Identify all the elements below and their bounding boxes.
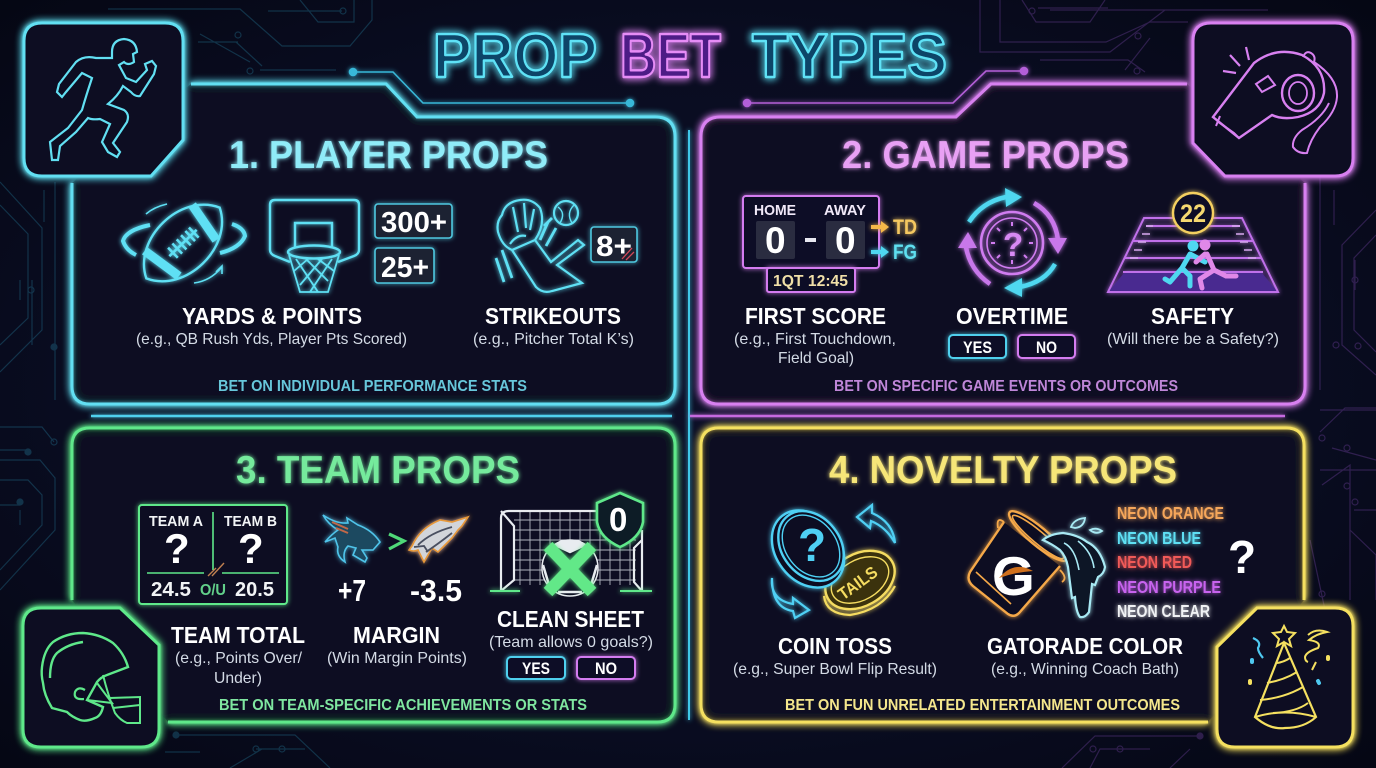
text: yards example: (e.g., QB Rush Yds, Player Pts Scored) xyxy=(136,331,407,348)
stat badge 25+: 25+ xyxy=(381,252,429,284)
label: safety: SAFETY xyxy=(1151,303,1234,329)
panel: novelty props xyxy=(701,428,1304,722)
icon: football field xyxy=(1108,218,1278,292)
label: clean sheet: CLEAN SHEET xyxy=(497,606,644,632)
icon box: party hat xyxy=(1217,608,1353,747)
text: first score example: Field Goal) xyxy=(778,350,854,367)
symbol: question mark: ? xyxy=(1228,531,1256,583)
label: overtime: OVERTIME xyxy=(956,303,1068,329)
list: neon colors: NEON CLEAR xyxy=(1117,601,1210,621)
footer: novelty props: BET ON FUN UNRELATED ENTERTAINMENT OUTCOMES xyxy=(785,697,1180,714)
scoreboard: AWAY xyxy=(824,202,866,219)
icon: gatorade bucket xyxy=(969,505,1072,616)
panel 2 border xyxy=(701,84,1305,404)
arrow: coin flip bottom xyxy=(772,578,809,618)
button: no: NO xyxy=(1036,338,1057,357)
list: neon colors: NEON PURPLE xyxy=(1117,577,1221,597)
icon: goal with clean sheet: 0 xyxy=(609,501,627,538)
scoreboard: HOME xyxy=(754,202,796,219)
icon: glove and baseball xyxy=(496,200,584,292)
text: team total example xyxy=(175,650,303,687)
heading: 4. novelty props: 4. NOVELTY PROPS xyxy=(829,449,1177,492)
center divider: vertical xyxy=(688,130,690,720)
icon: safety players xyxy=(1165,240,1236,288)
arrow: touchdown: TD xyxy=(893,216,917,239)
team total board: 20.5 xyxy=(235,579,274,601)
label: coin toss: COIN TOSS xyxy=(778,633,892,659)
footer: team props: BET ON TEAM-SPECIFIC ACHIEVEMENTS OR STATS xyxy=(219,697,587,714)
badge: 22: 22 xyxy=(1180,200,1206,228)
team total board: TEAM A xyxy=(149,513,203,530)
value: -3.5: -3.5 xyxy=(410,573,462,608)
icon: overtime clock: ? xyxy=(1003,226,1023,263)
scoreboard: 0 xyxy=(765,220,786,261)
icon: pouring liquid xyxy=(1043,518,1105,617)
icon: tails coin: TAILS xyxy=(834,563,881,604)
text: first score example: (e.g., First Touchdown, xyxy=(734,331,896,348)
list: neon colors: NEON BLUE xyxy=(1117,528,1201,548)
scoreboard xyxy=(743,196,879,292)
title: BET xyxy=(620,22,721,91)
icon: overtime clock xyxy=(958,188,1067,297)
list: neon colors: NEON RED xyxy=(1117,552,1192,572)
logo: eagle xyxy=(409,517,468,562)
icon: blue coin xyxy=(757,496,859,602)
arrow: field goal: FG xyxy=(893,241,917,264)
panel: team props xyxy=(72,428,675,722)
center divider: horizontal left xyxy=(91,415,672,417)
team total board: ? xyxy=(238,525,264,572)
icon: gatorade G logo: G xyxy=(992,545,1035,607)
text: team total example: Under) xyxy=(214,670,262,687)
button: no xyxy=(1018,335,1075,358)
button: yes xyxy=(507,657,565,679)
circuit connector left xyxy=(350,68,634,106)
text: safety example: (Will there be a Safety?) xyxy=(1107,331,1279,348)
title xyxy=(433,22,947,91)
icon box: runner xyxy=(24,23,183,176)
label: yards and points: YARDS & POINTS xyxy=(182,303,362,329)
icon: football xyxy=(123,187,245,299)
icon box: helmet xyxy=(23,608,159,747)
footer: player props: BET ON INDIVIDUAL PERFORMANCE STATS xyxy=(218,378,527,395)
label: gatorade color: GATORADE COLOR xyxy=(987,633,1183,659)
label: first score: FIRST SCORE xyxy=(745,303,886,329)
logo: panther xyxy=(323,515,380,562)
team total board: O/U xyxy=(200,582,226,599)
badge: 22 xyxy=(1173,193,1213,233)
heading: 2. game props: 2. GAME PROPS xyxy=(842,134,1129,177)
icon: goal with clean sheet xyxy=(490,493,652,596)
panel 3 border xyxy=(72,428,675,722)
team total board: ? xyxy=(164,525,190,572)
text: first score example xyxy=(734,331,896,367)
button: yes: YES xyxy=(522,659,550,678)
title: PROP xyxy=(433,22,597,91)
label: margin: MARGIN xyxy=(353,622,440,648)
list: neon colors: NEON ORANGE xyxy=(1117,503,1224,523)
text: team total example: (e.g., Points Over/ xyxy=(175,650,303,667)
panel: player props xyxy=(72,84,675,404)
center divider: horizontal right xyxy=(690,415,1285,417)
scoreboard: 0 xyxy=(835,220,856,261)
label: team total: TEAM TOTAL xyxy=(171,622,305,648)
circuit connector right xyxy=(744,68,1028,106)
arrow: touchdown xyxy=(871,216,917,239)
arrow: field goal xyxy=(871,241,917,264)
icon: basketball hoop xyxy=(270,200,359,292)
stat badge 300+: 300+ xyxy=(381,207,447,239)
label: strikeouts: STRIKEOUTS xyxy=(485,303,621,329)
symbol: greater than xyxy=(389,534,404,549)
panel 4 border xyxy=(701,428,1304,722)
icon: tails coin xyxy=(815,539,905,621)
team total board xyxy=(139,505,287,604)
value: +7: +7 xyxy=(338,573,366,608)
panel: game props xyxy=(701,84,1305,404)
panel 1 border xyxy=(72,84,675,404)
text: coin toss example: (e.g., Super Bowl Flip Result) xyxy=(733,661,937,678)
heading: 1. player props: 1. PLAYER PROPS xyxy=(229,134,548,177)
team total board: TEAM B xyxy=(224,513,277,530)
icon box: whistle xyxy=(1193,23,1353,176)
text: clean sheet example: (Team allows 0 goals?) xyxy=(489,634,653,651)
button: no xyxy=(577,657,635,679)
list: neon colors xyxy=(1117,503,1224,621)
heading: 3. team props: 3. TEAM PROPS xyxy=(236,449,520,492)
scoreboard: 1QT 12:45 xyxy=(773,273,848,290)
button: no: NO xyxy=(595,659,617,678)
team total board: 24.5 xyxy=(151,579,191,601)
icon: blue coin: ? xyxy=(798,519,826,571)
text: margin example: (Win Margin Points) xyxy=(327,650,467,667)
button: yes xyxy=(949,335,1006,358)
title: TYPES xyxy=(752,22,947,91)
stat badge 8+ xyxy=(591,227,637,263)
footer: game props: BET ON SPECIFIC GAME EVENTS OR OUTCOMES xyxy=(834,378,1178,395)
text: gatorade example: (e.g., Winning Coach Bath) xyxy=(991,661,1179,678)
text: strikeouts example: (e.g., Pitcher Total K’s) xyxy=(473,331,634,348)
arrow: coin flip top xyxy=(857,505,895,543)
button: yes: YES xyxy=(963,338,992,357)
stat badge 8+: 8+ xyxy=(596,231,632,263)
